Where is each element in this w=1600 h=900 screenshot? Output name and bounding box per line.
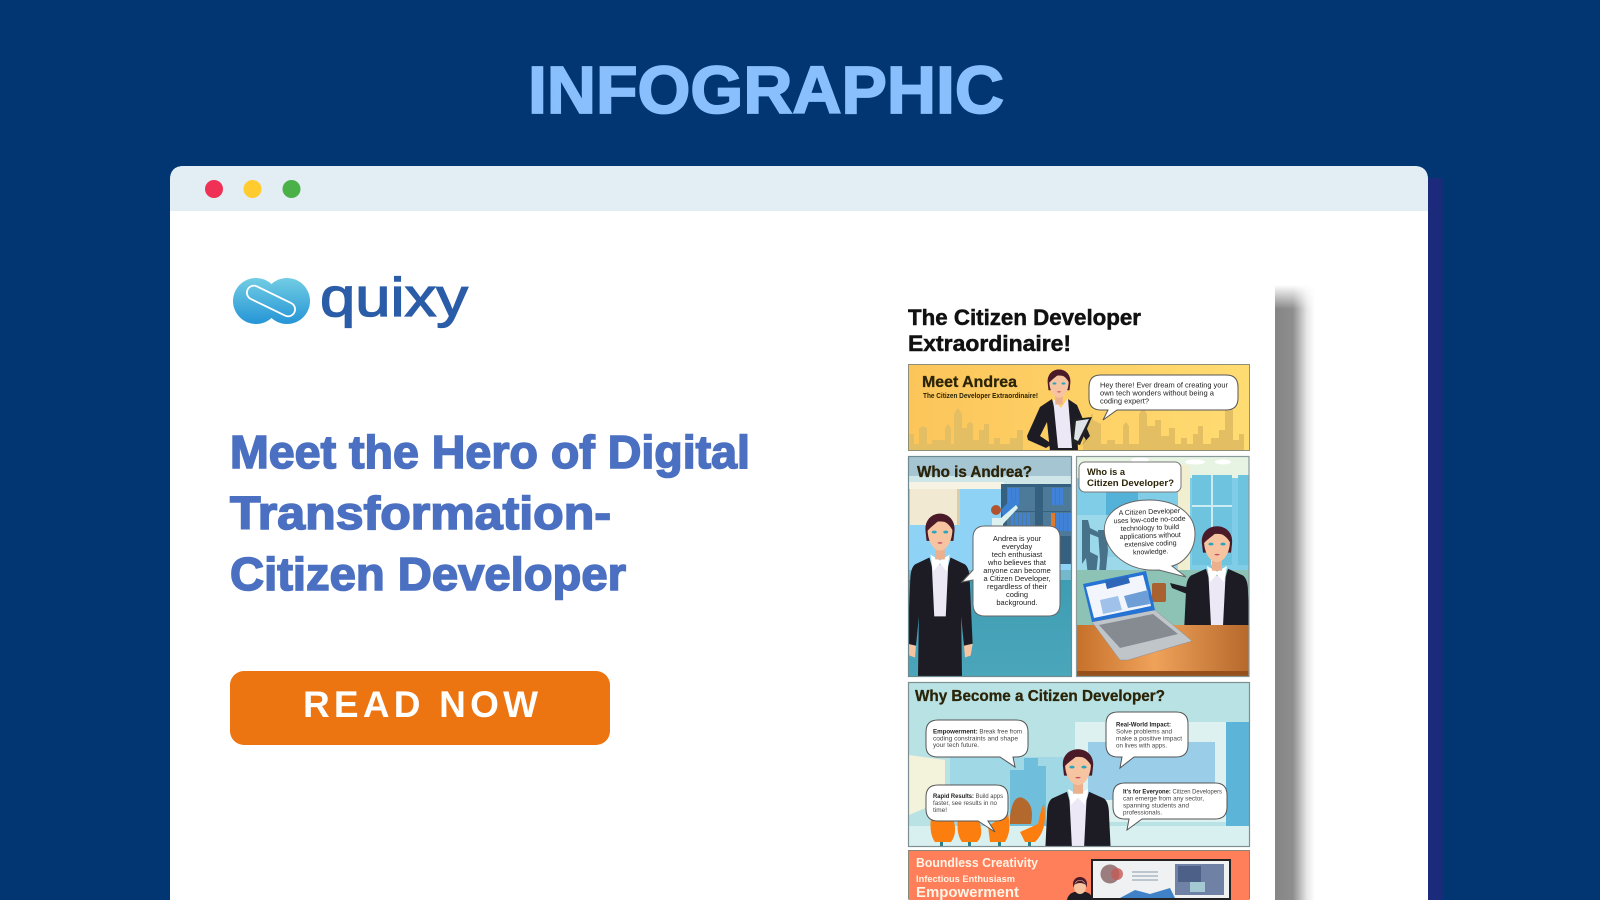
speech bubble: empowerment: your tech future. bbox=[933, 743, 979, 749]
laptop bbox=[1083, 571, 1192, 660]
comic page preview bbox=[907, 285, 1315, 900]
speech bubble: greeting: Hey there! Ever dream of creating your bbox=[1100, 380, 1228, 390]
headline: Transformation- bbox=[230, 487, 611, 539]
speech bubble: real-world impact: make a positive impact bbox=[1116, 736, 1182, 742]
icon: infinity mark bbox=[233, 278, 310, 324]
read now button: READ NOW bbox=[303, 684, 538, 725]
speech bubble: who is Andrea: Andrea is your bbox=[993, 534, 1042, 543]
character: Andrea presenting bbox=[1045, 749, 1111, 846]
speech bubble: rapid results: faster, see results in no bbox=[933, 801, 998, 807]
panel: Who is a Citizen Developer? bbox=[1076, 456, 1251, 688]
speech bubble: it's for everyone: spanning students and bbox=[1123, 804, 1189, 810]
speech bubble: who is Andrea: everyday bbox=[1002, 542, 1032, 551]
speech bubble: who is Andrea: a Citizen Developer, bbox=[983, 574, 1051, 583]
headline: Citizen Developer bbox=[230, 548, 626, 600]
speech bubble: definition: knowledge. bbox=[1133, 548, 1169, 557]
headline: Meet the Hero of Digital bbox=[230, 426, 750, 478]
red window dot bbox=[205, 180, 223, 198]
silhouettes bbox=[1082, 520, 1098, 570]
yellow window dot bbox=[244, 180, 262, 198]
city skyline bbox=[909, 406, 1244, 451]
window blinds bbox=[910, 489, 957, 525]
speech bubble: definition: A Citizen Developer bbox=[1119, 508, 1181, 517]
presentation board bbox=[1092, 860, 1230, 899]
title box: Who is a bbox=[1087, 467, 1126, 478]
browser window bbox=[170, 166, 1444, 900]
panel: boundless creativity bbox=[908, 850, 1250, 900]
speech bubble: real-world impact: Real-World Impact: bbox=[1116, 722, 1171, 728]
orange chairs bbox=[930, 797, 1045, 847]
title: INFOGRAPHIC bbox=[528, 53, 1004, 128]
speech bubble: real-world impact: Solve problems and bbox=[1116, 730, 1172, 736]
headline bbox=[230, 426, 750, 600]
speech bubble: rapid results: time! bbox=[933, 808, 947, 814]
window title bar bbox=[170, 166, 1428, 211]
background worker bbox=[991, 498, 1019, 526]
text: panel list bbox=[916, 856, 1038, 900]
panel: Why Become a Citizen Developer? bbox=[908, 682, 1250, 848]
speech bubble: who is Andrea: anyone can become bbox=[983, 566, 1051, 575]
speech bubble: who is Andrea: who believes that bbox=[987, 558, 1047, 567]
speech bubble: definition bbox=[1104, 500, 1195, 577]
panel: Who is Andrea? bbox=[907, 456, 1073, 681]
heading: Why Become a Citizen Developer?: Why Become a Citizen Developer? bbox=[915, 688, 1165, 705]
speech bubble: empowerment: Empowerment: Break free from bbox=[933, 730, 1022, 736]
speech bubble: rapid results bbox=[926, 785, 1008, 832]
speech bubble: who is Andrea: regardless of their bbox=[987, 582, 1048, 591]
read now button bbox=[230, 671, 610, 745]
filing shelves bbox=[1001, 484, 1073, 564]
speech bubble: greeting: coding expert? bbox=[1100, 396, 1149, 406]
speech bubble: who is Andrea: coding bbox=[1006, 590, 1028, 599]
comic title: Extraordinaire! bbox=[908, 331, 1071, 356]
speech bubble: who is Andrea bbox=[962, 526, 1060, 616]
speech bubble: who is Andrea: tech enthusiast bbox=[992, 550, 1043, 559]
logo wordmark: quixy bbox=[320, 266, 469, 328]
desk bbox=[1077, 625, 1248, 671]
green window dot bbox=[282, 180, 300, 198]
coffee mug bbox=[1152, 583, 1166, 602]
teal floor bbox=[908, 580, 1072, 678]
windows bbox=[950, 722, 1249, 826]
speech bubble: empowerment bbox=[926, 720, 1028, 767]
panel: Meet Andrea bbox=[908, 364, 1250, 451]
speech bubble: definition: applications without bbox=[1120, 532, 1181, 541]
speech bubble: greeting: own tech wonders without being a bbox=[1100, 388, 1215, 398]
comic title bbox=[908, 305, 1141, 356]
speech bubble: real-world impact: on lives with apps. bbox=[1116, 744, 1167, 750]
character: Andrea at desk bbox=[1184, 526, 1248, 625]
office windows bbox=[1077, 475, 1249, 580]
text: subtitle: The Citizen Developer Extraordinaire! bbox=[923, 393, 1038, 400]
speech bubble: who is Andrea: background. bbox=[996, 598, 1038, 607]
page drop shadow bbox=[1275, 285, 1315, 900]
title box bbox=[1079, 462, 1181, 492]
speech bubble: rapid results: Rapid Results: Build apps bbox=[933, 794, 1003, 800]
text: Meet Andrea: Meet Andrea bbox=[922, 374, 1017, 391]
window body bbox=[170, 166, 1428, 900]
quixy logo bbox=[233, 266, 469, 328]
text: panel list: Infectious Enthusiasm bbox=[916, 874, 1015, 885]
speech bubble: definition: uses low-code no-code bbox=[1114, 516, 1186, 525]
window side shadow bbox=[1426, 178, 1444, 900]
speech bubble: definition: extensive coding bbox=[1124, 540, 1177, 549]
character: Andrea small bbox=[1067, 877, 1093, 900]
text: panel list: Boundless Creativity bbox=[916, 856, 1038, 870]
speech bubble: definition: technology to build bbox=[1121, 524, 1179, 533]
speech bubble: it's for everyone: It's for Everyone: Citizen Developers bbox=[1123, 790, 1222, 796]
speech bubble: it's for everyone: professionals. bbox=[1123, 810, 1162, 816]
speech bubble: it's for everyone: can emerge from any sector, bbox=[1123, 796, 1204, 802]
pillar bbox=[1178, 465, 1190, 570]
character: Andrea with tablet bbox=[1027, 369, 1092, 451]
infographic canvas bbox=[170, 65, 1444, 900]
title box: Citizen Developer? bbox=[1087, 478, 1174, 489]
heading: Who is Andrea?: Who is Andrea? bbox=[917, 464, 1032, 481]
lower wall bbox=[1076, 570, 1250, 630]
speech bubble: empowerment: coding constraints and shape bbox=[933, 736, 1019, 742]
speech bubble: it's for everyone bbox=[1113, 783, 1227, 830]
comic title: The Citizen Developer bbox=[908, 305, 1141, 330]
speech bubble: greeting bbox=[1089, 375, 1238, 420]
character: Andrea standing bbox=[907, 514, 973, 681]
speech bubble: real-world impact bbox=[1106, 712, 1188, 768]
